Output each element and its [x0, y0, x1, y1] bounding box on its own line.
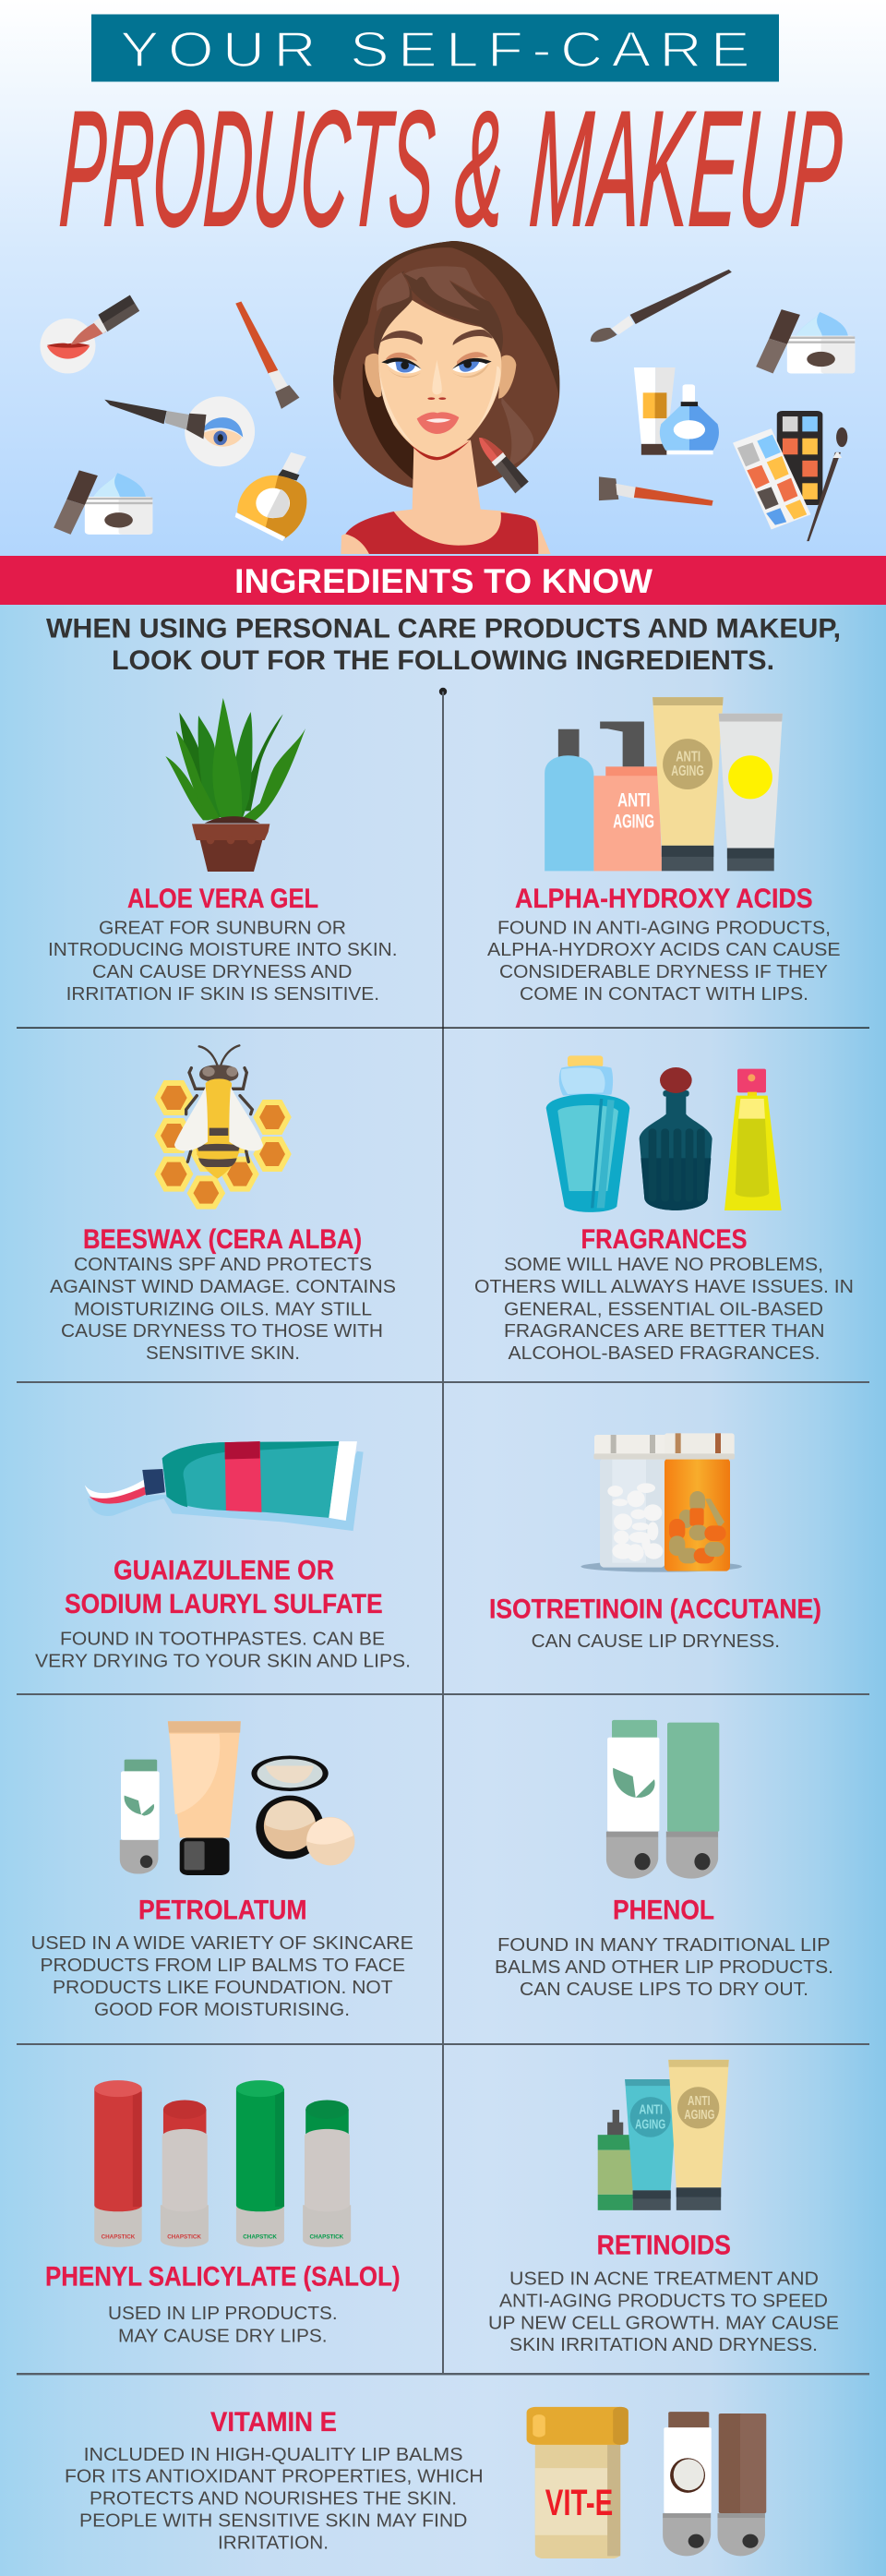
description: IRRITATION.	[218, 2532, 329, 2553]
description: GOOD FOR MOISTURISING.	[94, 1999, 350, 2020]
heading: FRAGRANCES	[581, 1224, 748, 1255]
description	[495, 1934, 833, 2000]
panel: phenyl salicylate	[45, 2080, 401, 2347]
heading: SODIUM LAURYL SULFATE	[65, 1589, 383, 1619]
description: PRODUCTS FROM LIP BALMS TO FACE	[41, 1955, 405, 1976]
main title: &	[451, 77, 509, 260]
heading	[65, 1555, 383, 1619]
description: CAN CAUSE DRYNESS AND	[92, 961, 353, 982]
description: CONTAINS SPF AND PROTECTS	[74, 1254, 372, 1275]
description: FOR ITS ANTIOXIDANT PROPERTIES, WHICH	[65, 2465, 484, 2487]
panel: retinoids	[488, 2060, 839, 2355]
icon: chapsticks	[94, 2080, 351, 2247]
icon: chapsticks: CHAPSTICK	[167, 2233, 201, 2240]
title banner	[91, 15, 779, 81]
icon: anti aging tubes: ANTI	[639, 2103, 663, 2117]
description: ANTI-AGING PRODUCTS TO SPEED	[499, 2290, 828, 2312]
description: INTRODUCING MOISTURE INTO SKIN.	[48, 939, 397, 960]
description: FOUND IN TOOTHPASTES. CAN BE	[60, 1629, 385, 1650]
description: COME IN CONTACT WITH LIPS.	[520, 983, 808, 1005]
description: SKIN IRRITATION AND DRYNESS.	[509, 2334, 818, 2355]
title banner: YOUR SELF-CARE	[120, 23, 759, 78]
icon: eye shadow brush	[104, 396, 255, 466]
description: MAY CAUSE DRY LIPS.	[118, 2325, 328, 2347]
description	[35, 1629, 411, 1671]
icon: lip balm, foundation and compact	[120, 1721, 354, 1875]
icon: fragrance bottles	[546, 1055, 782, 1212]
icon: anti aging tubes: ANTI	[688, 2094, 711, 2109]
description: CAUSE DRYNESS TO THOSE WITH	[61, 1320, 383, 1342]
description: PEOPLE WITH SENSITIVE SKIN MAY FIND	[79, 2510, 467, 2532]
description: USED IN ACNE TREATMENT AND	[509, 2268, 819, 2289]
panel: beeswax	[50, 1045, 396, 1364]
panel: vitamin e	[65, 2407, 766, 2558]
icon: eyeshadow palettes and brush	[733, 411, 847, 541]
heading: RETINOIDS	[597, 2231, 731, 2261]
icon: pill bottles	[581, 1433, 742, 1572]
description: VERY DRYING TO YOUR SKIN AND LIPS.	[35, 1650, 411, 1671]
panel: phenol	[495, 1720, 833, 2000]
description: FOUND IN ANTI-AGING PRODUCTS,	[497, 917, 831, 938]
description: PROTECTS AND NOURISHES THE SKIN.	[90, 2488, 457, 2510]
description	[31, 1932, 413, 2020]
icon: anti aging tubes: AGING	[635, 2118, 665, 2132]
description	[474, 1254, 854, 1364]
description: CONSIDERABLE DRYNESS IF THEY	[499, 961, 828, 982]
heading: PHENYL SALICYLATE (SALOL)	[45, 2262, 401, 2292]
description: FOUND IN MANY TRADITIONAL LIP	[497, 1934, 831, 1956]
description: GENERAL, ESSENTIAL OIL-BASED	[504, 1298, 823, 1319]
icon: lipstick on lips	[40, 295, 139, 374]
description: CAN CAUSE LIPS TO DRY OUT.	[520, 1979, 808, 2000]
heading: PETROLATUM	[138, 1896, 306, 1926]
icon: bee on honeycomb	[158, 1045, 288, 1207]
icon: anti aging tubes	[598, 2060, 729, 2210]
panel: alpha-hydroxy acids	[487, 697, 841, 1005]
icon: chapsticks: CHAPSTICK	[102, 2233, 136, 2240]
illustration: woman portrait	[333, 241, 559, 554]
icon: tube and blue bottle	[634, 367, 719, 455]
description: SOME WILL HAVE NO PROBLEMS,	[504, 1254, 823, 1275]
description: IRRITATION IF SKIN IS SENSITIVE.	[66, 983, 379, 1005]
icon: vitamin e bottle	[527, 2407, 629, 2558]
description: USED IN LIP PRODUCTS.	[108, 2303, 338, 2324]
panel: aloe vera gel	[48, 698, 397, 1005]
description: BALMS AND OTHER LIP PRODUCTS.	[495, 1956, 833, 1978]
heading: ALPHA-HYDROXY ACIDS	[515, 884, 813, 914]
icon: anti aging bottles	[545, 697, 783, 871]
description: INCLUDED IN HIGH-QUALITY LIP BALMS	[84, 2444, 462, 2465]
icon: mint lip balm	[606, 1720, 719, 1879]
heading: PHENOL	[613, 1896, 714, 1926]
intro text	[46, 613, 841, 676]
description	[65, 2444, 484, 2553]
heading: VITAMIN E	[210, 2407, 337, 2438]
panel: petrolatum	[31, 1721, 413, 2020]
section banner: ingredients to know	[0, 556, 886, 605]
intro text: WHEN USING PERSONAL CARE PRODUCTS AND MAKEUP,	[46, 613, 841, 644]
icon: chapsticks: CHAPSTICK	[309, 2233, 344, 2240]
description: ALPHA-HYDROXY ACIDS CAN CAUSE	[487, 939, 841, 960]
icon: anti aging bottles: AGING	[671, 764, 704, 779]
description: FRAGRANCES ARE BETTER THAN	[504, 1320, 825, 1342]
description	[487, 917, 841, 1005]
description	[108, 2303, 338, 2347]
description: GREAT FOR SUNBURN OR	[99, 917, 346, 938]
icon: flat brush bottom right	[599, 476, 713, 506]
description	[50, 1254, 396, 1364]
icon: anti aging tubes: AGING	[684, 2108, 714, 2123]
icon: coconut lip balm	[663, 2412, 766, 2556]
description: ALCOHOL-BASED FRAGRANCES.	[508, 1342, 820, 1364]
heading: ALOE VERA GEL	[127, 884, 318, 914]
description: UP NEW CELL GROWTH. MAY CAUSE	[488, 2312, 839, 2334]
icon: makeup brush orange	[235, 302, 299, 409]
description: PRODUCTS LIKE FOUNDATION. NOT	[53, 1977, 393, 1998]
icon: vitamin e bottle: VIT-E	[545, 2483, 613, 2523]
icon: cream jar right	[756, 309, 855, 374]
icon: aloe plant	[165, 698, 305, 872]
icon: chapsticks: CHAPSTICK	[243, 2233, 278, 2240]
icon: toothpaste tube	[85, 1441, 364, 1531]
description: MOISTURIZING OILS. MAY STILL	[74, 1298, 372, 1319]
heading: BEESWAX (CERA ALBA)	[83, 1224, 362, 1255]
icon: yellow perfume bottle	[235, 452, 306, 541]
icon: anti aging bottles: ANTI	[676, 749, 700, 764]
heading: ISOTRETINOIN (ACCUTANE)	[489, 1595, 821, 1625]
icon: anti aging bottles: AGING	[613, 811, 654, 832]
panel: guaiazulene or sodium lauryl sulfate	[35, 1441, 411, 1671]
icon: long brush top right	[591, 270, 732, 343]
vertical divider	[439, 688, 447, 2374]
panel: isotretinoin	[489, 1433, 821, 1652]
description	[48, 917, 397, 1005]
section banner: ingredients to know: INGREDIENTS TO KNOW	[234, 562, 653, 600]
heading: GUAIAZULENE OR	[114, 1555, 334, 1585]
description: SENSITIVE SKIN.	[146, 1342, 300, 1364]
intro text: LOOK OUT FOR THE FOLLOWING INGREDIENTS.	[112, 645, 774, 676]
description: USED IN A WIDE VARIETY OF SKINCARE	[31, 1932, 413, 1954]
icon: cream jar left	[54, 470, 152, 535]
description	[488, 2268, 839, 2355]
icon: anti aging bottles: ANTI	[617, 789, 651, 811]
description: AGAINST WIND DAMAGE. CONTAINS	[50, 1276, 396, 1297]
description: OTHERS WILL ALWAYS HAVE ISSUES. IN	[474, 1276, 854, 1297]
description: CAN CAUSE LIP DRYNESS.	[532, 1631, 780, 1652]
panel: fragrances	[474, 1055, 854, 1364]
